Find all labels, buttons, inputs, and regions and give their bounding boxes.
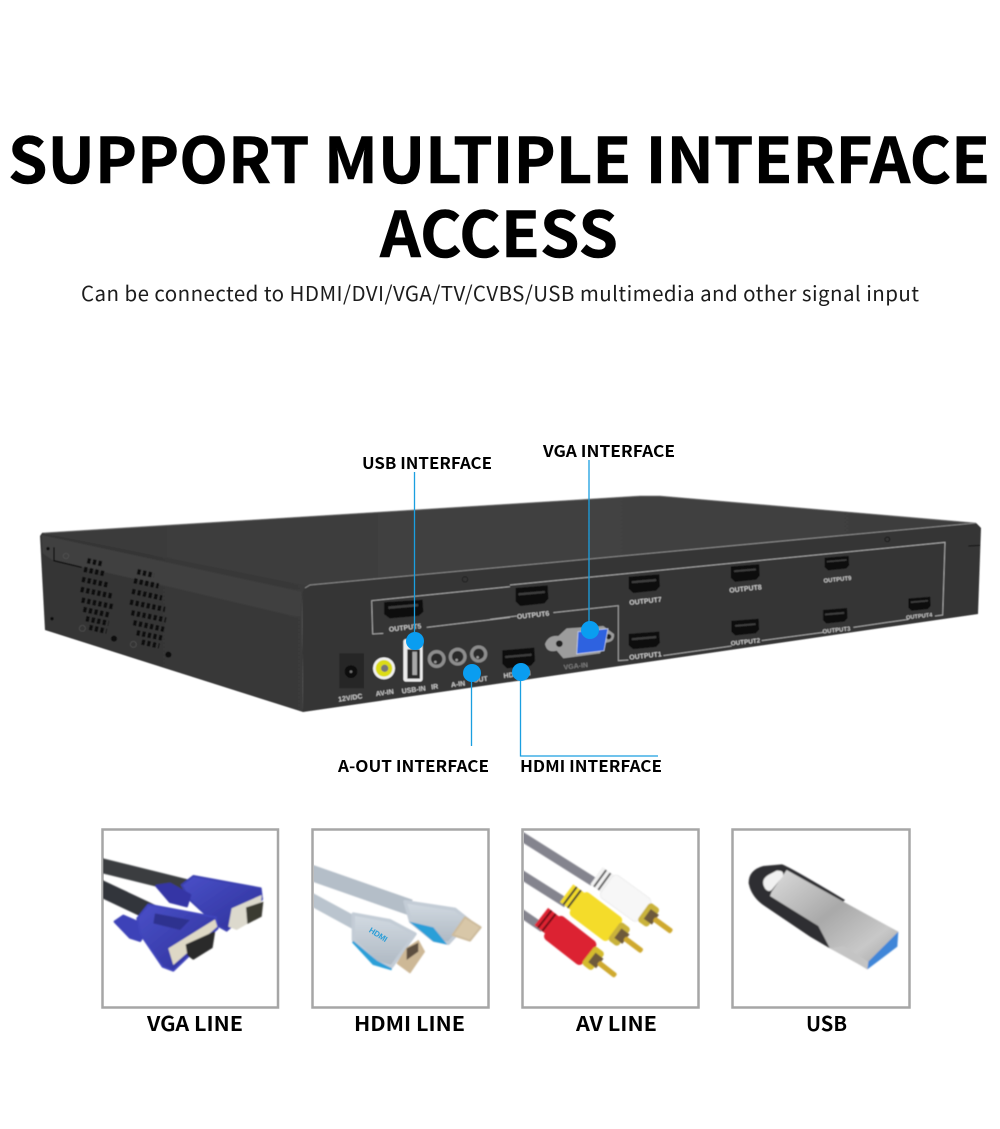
port: output 5: OUTPUT5 xyxy=(389,623,422,634)
left and front panel details xyxy=(42,535,510,704)
HDMI logo: HDMI xyxy=(367,926,389,944)
port: A-OUT jack xyxy=(470,645,489,685)
callout: A-OUT interface: A-OUT INTERFACE xyxy=(337,753,489,777)
port: A-IN jack xyxy=(449,648,467,689)
caption: VGA line: VGA LINE xyxy=(146,1008,243,1037)
device: video wall controller xyxy=(40,496,981,712)
title: SUPPORT MULTIPLE INTERFACE xyxy=(8,111,990,202)
port: output 7: OUTPUT7 xyxy=(629,597,662,607)
callout: VGA interface xyxy=(542,438,675,639)
right panel details xyxy=(490,537,980,680)
panel: USB xyxy=(732,830,910,1008)
port: AV in xyxy=(373,657,395,698)
icon: fan vent 1 xyxy=(81,561,113,631)
icon: fan vent 2 xyxy=(130,572,166,646)
port: output 3 xyxy=(822,608,851,635)
port: VGA in xyxy=(545,626,614,672)
panel: AV line xyxy=(517,830,698,1008)
caption: AV line: AV LINE xyxy=(575,1008,657,1037)
port: output 4: OUTPUT4 xyxy=(906,613,934,621)
port: output 1: OUTPUT1 xyxy=(629,651,662,662)
output frame right xyxy=(510,542,945,616)
yellow plug xyxy=(559,884,644,954)
panel: HDMI line xyxy=(303,830,488,1008)
port: HDMI in: HDMI-IN xyxy=(503,670,531,680)
port: 12V DC xyxy=(338,653,364,704)
callout: HDMI interface: HDMI INTERFACE xyxy=(520,753,662,777)
port: A-IN jack: A-IN xyxy=(451,680,466,689)
caption: USB: USB xyxy=(806,1008,847,1037)
panel: VGA line xyxy=(90,830,278,1008)
port: output 2 xyxy=(730,619,761,648)
port: output 3: OUTPUT3 xyxy=(822,626,851,635)
output frame left xyxy=(372,587,510,634)
port: output 2: OUTPUT2 xyxy=(730,637,761,648)
icon: VGA cable xyxy=(90,863,263,971)
callout: USB interface xyxy=(362,450,492,650)
icon: RCA cables xyxy=(524,832,674,978)
port: output 7 xyxy=(629,574,662,607)
port: IR jack xyxy=(428,650,446,691)
callout: HDMI interface xyxy=(512,663,662,777)
port: output 9: OUTPUT9 xyxy=(823,576,852,585)
port: IR jack: IR xyxy=(431,684,439,691)
port: USB in: USB-IN xyxy=(401,686,426,695)
port: output 1 xyxy=(629,632,662,662)
port: output 8: OUTPUT8 xyxy=(729,584,762,595)
port: HDMI in xyxy=(502,648,535,680)
device body faces xyxy=(40,496,981,712)
port: A-OUT jack: OUT xyxy=(473,676,489,685)
port: AV in: AV-IN xyxy=(375,689,394,698)
caption: HDMI line: HDMI LINE xyxy=(354,1008,465,1037)
port: 12V DC: 12V/DC xyxy=(338,693,363,704)
icon: USB flash drive xyxy=(749,864,898,969)
title xyxy=(8,111,990,276)
red plug xyxy=(534,907,618,978)
port: USB in xyxy=(401,639,426,695)
port: output 6: OUTPUT6 xyxy=(517,611,550,621)
subtitle: Can be connected to HDMI/DVI/VGA/TV/CVBS/USB multimedia and other signal input xyxy=(81,277,919,307)
port: output 9 xyxy=(823,556,852,585)
title: ACCESS xyxy=(379,185,618,276)
port: output 8 xyxy=(729,564,762,595)
port: VGA in: VGA-IN xyxy=(563,662,588,672)
callout: VGA interface: VGA INTERFACE xyxy=(542,438,675,462)
port: output 6 xyxy=(516,585,550,621)
port: output 5 xyxy=(384,600,423,634)
callout: A-OUT interface xyxy=(337,664,489,777)
icon: HDMI cable xyxy=(303,870,481,973)
white plug xyxy=(590,868,674,934)
callout: USB interface: USB INTERFACE xyxy=(362,450,492,474)
port: output 4 xyxy=(906,597,934,621)
